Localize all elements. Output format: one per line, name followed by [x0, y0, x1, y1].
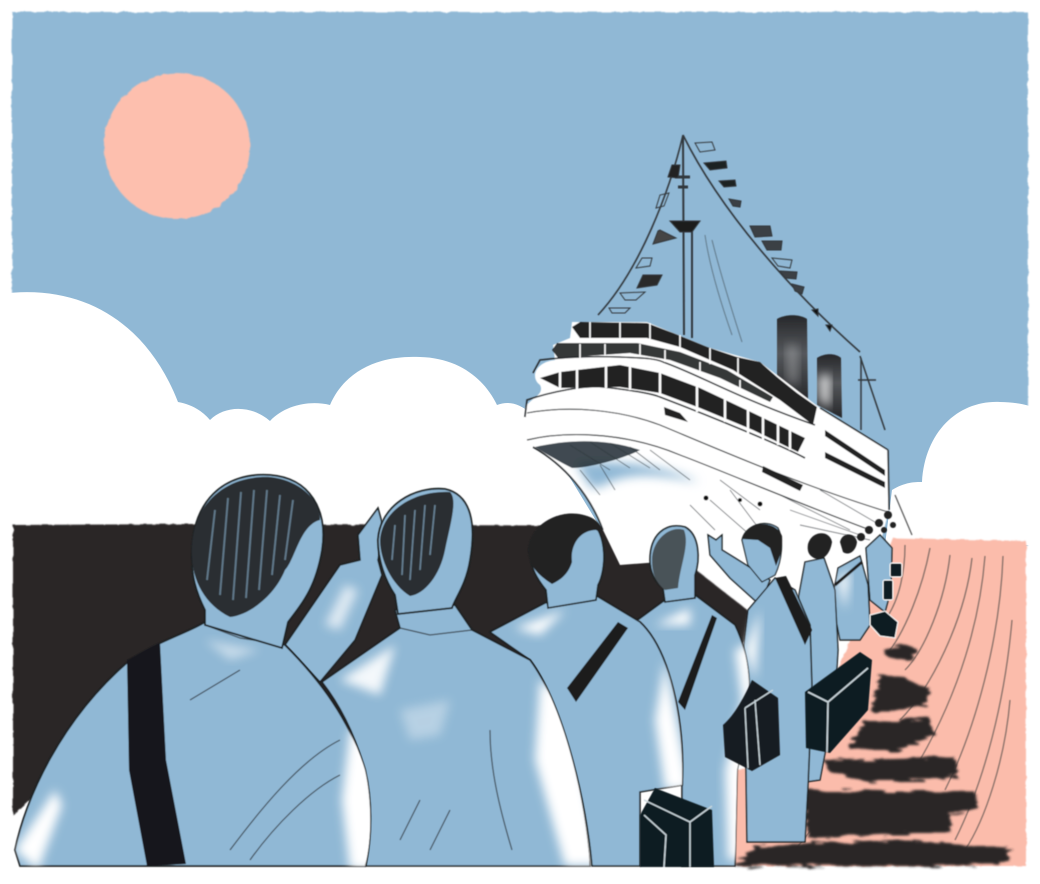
- passenger 1: [15, 475, 385, 870]
- masts and rigging: [598, 135, 912, 535]
- rear passengers in the far queue: [798, 511, 902, 782]
- hull: [525, 322, 889, 565]
- ocean liner: [525, 135, 912, 565]
- suitcase 1: [640, 788, 714, 867]
- pennant flags: [609, 142, 832, 331]
- funnels: [777, 315, 808, 400]
- window frames: [560, 322, 790, 450]
- suitcase 3: [805, 652, 872, 753]
- far passengers: [866, 535, 892, 612]
- passenger 5: man waving in the queue: [708, 524, 812, 842]
- sky: [12, 12, 1028, 545]
- passenger 1 raised arm: [285, 508, 384, 682]
- suitcase 2: [723, 680, 780, 771]
- clouds: [0, 292, 1040, 560]
- passenger 4: [635, 526, 755, 866]
- hull outlines: [525, 357, 889, 530]
- shoulder strap: [775, 576, 812, 645]
- pier plank lines: [795, 545, 1012, 850]
- hull detail hatching: [690, 480, 880, 540]
- blue hull shadow under the flare: [575, 462, 700, 488]
- shadows on pier: [735, 645, 1012, 866]
- far heads: [808, 511, 896, 559]
- pier deck: [735, 538, 1026, 866]
- far suitcases: [870, 563, 902, 638]
- passenger 2: [322, 489, 600, 866]
- dark upper deck bands: [540, 322, 885, 491]
- shoulder strap: [127, 643, 186, 866]
- shoulder strap: [567, 622, 628, 702]
- shoulder strap: [678, 615, 717, 710]
- dark sea: [13, 524, 760, 815]
- passenger 3: [490, 514, 690, 866]
- sun: [104, 73, 250, 219]
